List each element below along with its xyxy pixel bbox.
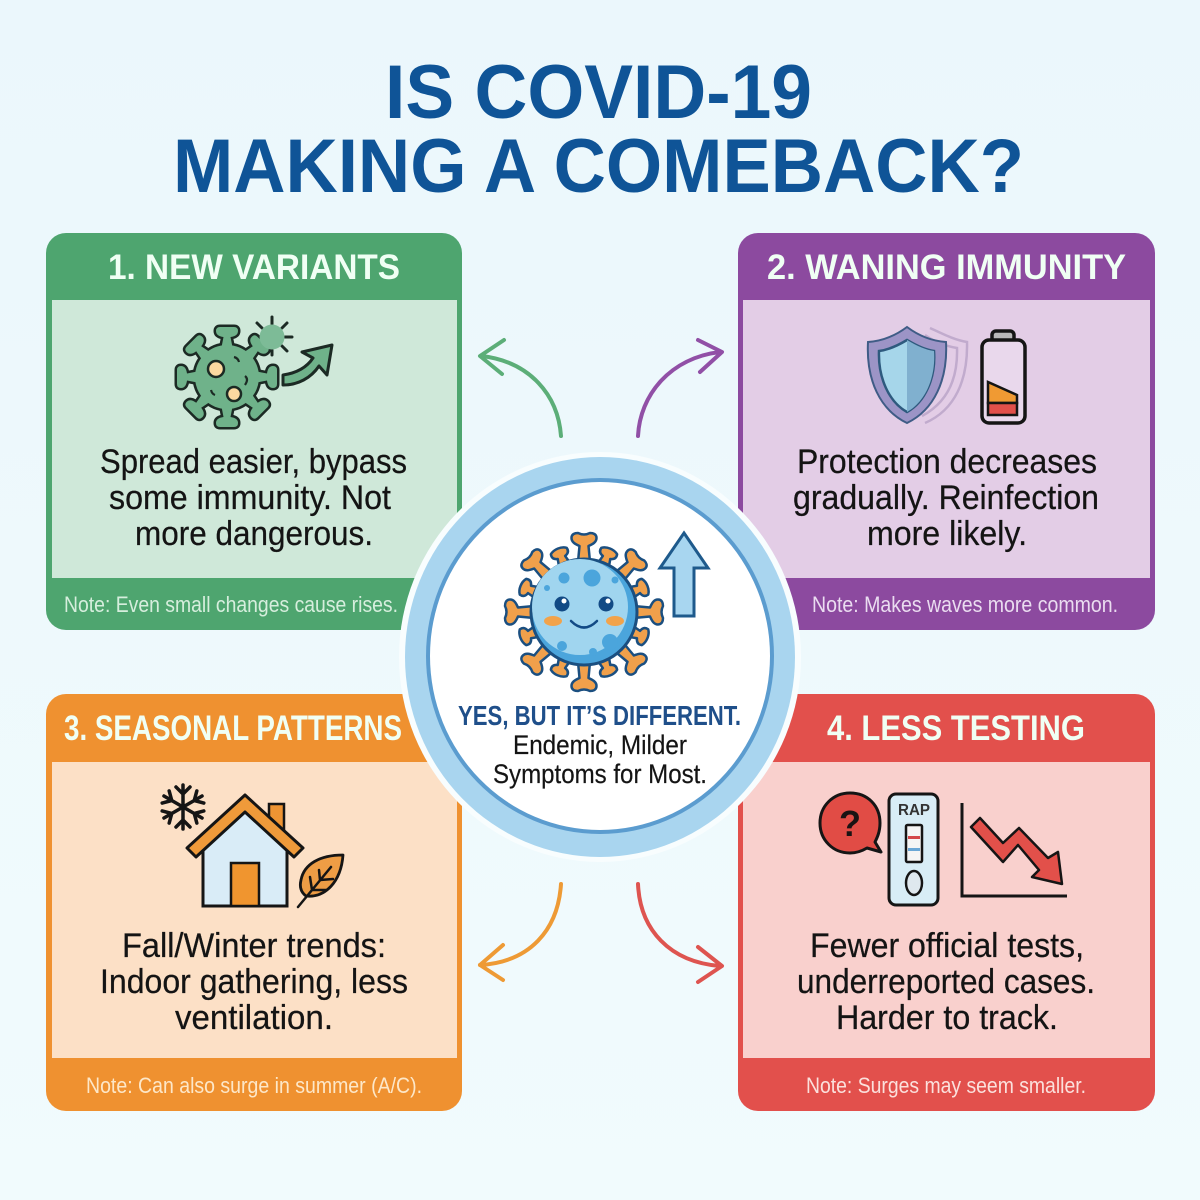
panel: less testing [738,694,1155,1111]
text: less testing description: underreported cases. [797,963,1095,1001]
arrow: center to new variants [480,340,561,436]
icon: smiling virus [505,533,663,691]
title: MAKING A COMEBACK? [173,124,1024,209]
note: less testing: Note: Surges may seem smaller. [806,1073,1086,1098]
text: seasonal patterns description: Indoor gathering, less [100,963,408,1001]
arrow: center to seasonal patterns [480,884,561,980]
heading: new variants: 1. NEW VARIANTS [108,247,400,287]
panel: new variants [46,233,462,630]
icon: up arrow [660,533,708,616]
text: waning immunity description [793,443,1099,553]
heading: waning immunity: 2. WANING IMMUNITY [767,247,1126,287]
arrow: center to waning immunity [638,340,722,436]
text: seasonal patterns description [100,927,408,1037]
panel: waning immunity [738,233,1155,630]
callout text [493,730,707,789]
note: waning immunity: Note: Makes waves more common. [812,592,1118,617]
text: seasonal patterns description: Fall/Winter trends: [122,927,386,965]
icon: fading shield and low battery [868,327,1025,423]
note: new variants: Note: Even small changes cause rises. [64,592,398,617]
text: new variants description: more dangerous. [135,515,373,553]
text: waning immunity description: Protection decreases [797,443,1097,481]
icon: question bubble, rapid test and falling chart: ? [839,803,861,844]
text: less testing description [797,927,1095,1037]
text: new variants description: Spread easier, bypass [100,443,407,481]
callout text: Endemic, Milder [513,730,687,760]
callout text: Symptoms for Most. [493,759,707,789]
icon: question bubble, rapid test and falling chart: RAP [898,802,930,819]
text: less testing description: Harder to track. [836,999,1058,1037]
panel: seasonal patterns [46,694,462,1111]
text: waning immunity description: gradually. Reinfection [793,479,1099,517]
text: waning immunity description: more likely. [867,515,1027,553]
center circle callout [399,452,801,862]
text: less testing description: Fewer official tests, [810,927,1084,965]
icon: house, snowflake and leaf [160,785,343,907]
callout heading: YES, BUT IT’S DIFFERENT. [458,700,741,731]
heading: seasonal patterns: 3. SEASONAL PATTERNS [64,708,402,748]
note: seasonal patterns: Note: Can also surge in summer (A/C). [86,1073,422,1098]
icon: green virus with rising arrow [177,317,332,427]
text: new variants description [100,443,407,553]
text: seasonal patterns description: ventilation. [175,999,333,1037]
text: new variants description: some immunity. Not [109,479,392,517]
icon: question bubble, rapid test and falling chart [820,793,1067,905]
title [173,50,1024,209]
heading: less testing: 4. LESS TESTING [827,708,1085,748]
title: IS COVID-19 [385,50,812,135]
arrow: center to less testing [638,884,722,982]
